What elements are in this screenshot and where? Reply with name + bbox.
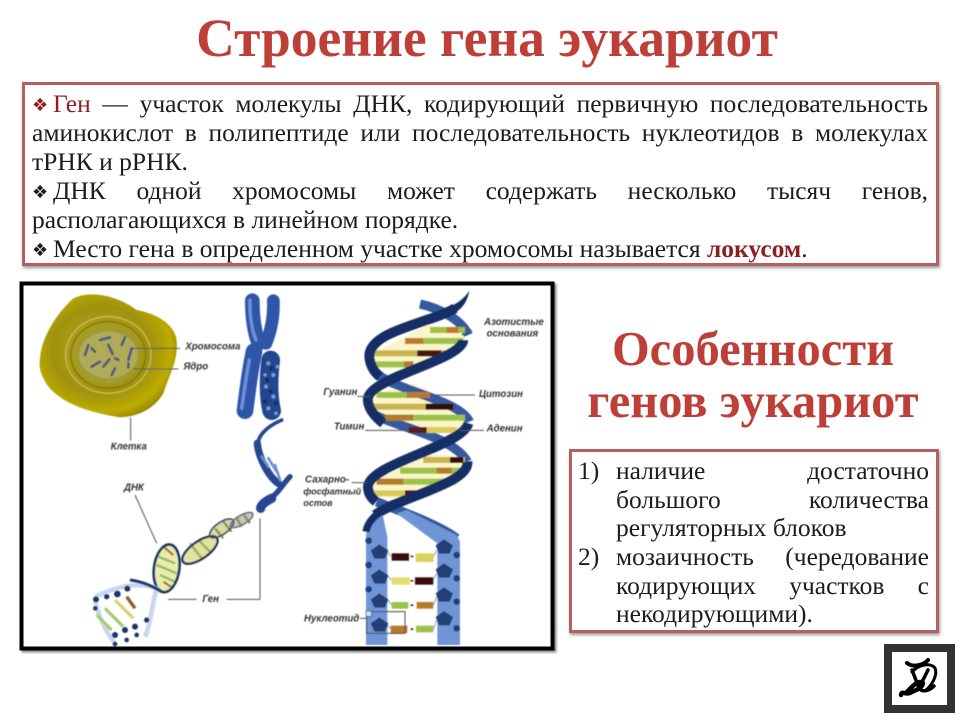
label: ДНК: ДНК	[123, 483, 145, 494]
list marker 1: 1)	[578, 456, 599, 485]
left half of diagram	[40, 294, 290, 646]
ladder rungs	[385, 550, 437, 633]
base pair bars	[372, 327, 465, 496]
list item 2 line 2: кодирующих участков с	[616, 571, 929, 600]
text line: gene definition 1: ❖	[32, 95, 48, 116]
label lines	[352, 330, 484, 618]
text line: gene definition 3: тРНК и рРНК.	[32, 147, 188, 176]
list item 2 line 1: мозаичность (чередование	[616, 542, 929, 571]
heading: features of eukaryotic genes: генов эукариот	[587, 375, 919, 428]
list item 1 line 3: регуляторных блоков	[616, 513, 847, 542]
list item 2 line 3: некодирующими).	[616, 599, 813, 628]
label: Клетка: Клетка	[111, 442, 147, 453]
label: Тимин: Тимин	[334, 422, 364, 433]
text line: DNA 1: ❖	[32, 182, 48, 203]
label: chromosome line	[131, 348, 180, 441]
text line: locus: Место гена в определенном участке хромосомы называется локусом.	[53, 234, 808, 263]
text line: locus: ❖	[32, 240, 48, 261]
label: остов: остов	[303, 498, 333, 508]
panel: features list	[569, 449, 939, 633]
icon: cell	[40, 294, 177, 417]
helix interior	[370, 325, 467, 500]
text line: DNA 1: ДНК одной хромосомы может содержать несколько тысяч генов,	[53, 176, 928, 205]
nucleotide marker	[367, 612, 405, 633]
label: Ген: Ген	[202, 594, 219, 605]
back strands	[375, 304, 469, 538]
helix tip	[443, 291, 469, 317]
heading: features of eukaryotic genes	[587, 323, 919, 428]
list item 1 line 2: большого количества	[616, 485, 929, 514]
label: фосфатный: фосфатный	[303, 486, 362, 496]
icon: chromosome	[242, 300, 279, 415]
ladder sugar and phosphate groups	[365, 537, 460, 632]
panel: gene definition text	[22, 82, 939, 266]
text line: gene definition 1: Ген — участок молекулы ДНК, кодирующий первичную последовательность	[53, 89, 928, 118]
label: Сахарно-: Сахарно-	[305, 475, 349, 486]
list marker 2: 2)	[578, 542, 599, 571]
text line: DNA 2: располагающихся в линейном порядке.	[32, 205, 458, 234]
title: Строение гена эукариот	[196, 8, 778, 68]
label: Гуанин: Гуанин	[323, 387, 357, 398]
ladder strips	[366, 510, 387, 645]
icon: small DNA helix	[93, 495, 260, 646]
label: основания: основания	[487, 329, 538, 340]
list item 1 line 1: наличие достаточно	[616, 456, 929, 485]
heading: features of eukaryotic genes: Особенности	[612, 323, 894, 376]
large DNA helix	[303, 291, 544, 645]
label: Ядро: Ядро	[182, 361, 208, 372]
front strands	[368, 308, 468, 515]
logo badge	[888, 648, 951, 709]
label: Нуклеотид: Нуклеотид	[304, 613, 359, 624]
diagram frame	[22, 284, 552, 648]
label: Хромосома: Хромосома	[184, 341, 241, 352]
text line: gene definition 2: аминокислот в полипептиде или последовательность нуклеотидов в молекулах	[32, 118, 928, 147]
label: Азотистые: Азотистые	[483, 317, 544, 328]
icon: coiled chromatin	[257, 420, 290, 508]
label: Аденин: Аденин	[486, 423, 523, 434]
label: Цитозин: Цитозин	[479, 389, 523, 400]
